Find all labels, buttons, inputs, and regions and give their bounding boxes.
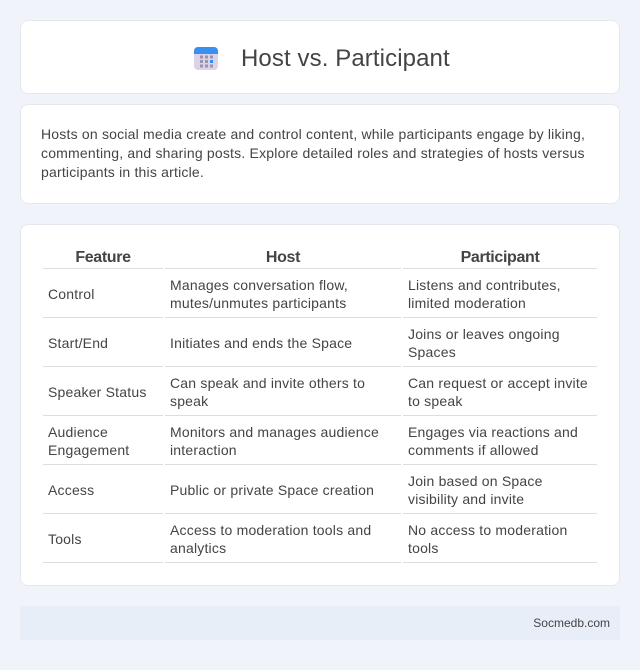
cell: Audience Engagement host: Monitors and manages audience — [170, 424, 379, 440]
cell: Access participant: Join based on Space — [408, 473, 543, 489]
cell: Tools participant: No access to moderation — [408, 522, 567, 538]
cell: Control participant — [408, 277, 561, 311]
row: Audience Engagement — [48, 424, 130, 458]
cell: Start/End participant — [408, 326, 560, 360]
title: Host vs. Participant — [241, 45, 450, 72]
intro text — [41, 126, 585, 180]
cell: Access host: Public or private Space creation — [170, 482, 374, 498]
cell: Start/End host: Initiates and ends the Space — [170, 335, 352, 351]
cell: Access participant — [408, 473, 543, 507]
cell: Tools participant — [408, 522, 567, 556]
intro text: Hosts on social media create and control content, while participants engage by liking, — [41, 126, 585, 142]
cell: Speaker Status participant — [408, 375, 588, 409]
intro text: commenting, and sharing posts. Explore detailed roles and strategies of hosts versus — [41, 145, 585, 161]
cell: Start/End participant: Joins or leaves ongoing — [408, 326, 560, 342]
cell: Speaker Status participant: Can request or accept invite — [408, 375, 588, 391]
panel: comparison table card — [20, 224, 620, 586]
cell: Tools host — [170, 522, 371, 556]
cell: Speaker Status participant: to speak — [408, 393, 463, 409]
cell: Audience Engagement participant: Engages via reactions and — [408, 424, 578, 440]
cell: Audience Engagement participant: comments if allowed — [408, 442, 539, 458]
cell: Tools host: analytics — [170, 540, 226, 556]
cell: Audience Engagement participant — [408, 424, 578, 458]
panel: intro card — [20, 104, 620, 204]
header: Participant: Participant — [461, 249, 539, 266]
cell: Control host — [170, 277, 348, 311]
cell: Tools host: Access to moderation tools and — [170, 522, 371, 538]
icon: calendar — [194, 47, 218, 70]
row: Audience Engagement: Engagement — [48, 442, 129, 458]
cell: Audience Engagement host: interaction — [170, 442, 237, 458]
cell: Access participant: visibility and invite — [408, 491, 524, 507]
intro text: participants in this article. — [41, 164, 204, 180]
cell: Control host: Manages conversation flow, — [170, 277, 348, 293]
footer text: Socmedb.com — [533, 616, 610, 630]
row: Tools: Tools — [48, 531, 82, 547]
row: Access: Access — [48, 482, 94, 498]
header: Host: Host — [266, 249, 300, 266]
row: Control: Control — [48, 286, 95, 302]
cell: Start/End participant: Spaces — [408, 344, 456, 360]
cell: Speaker Status host: speak — [170, 393, 208, 409]
cell: Control participant: limited moderation — [408, 295, 526, 311]
row: Audience Engagement: Audience — [48, 424, 108, 440]
cell: Speaker Status host: Can speak and invite others to — [170, 375, 365, 391]
header: Feature: Feature — [75, 249, 131, 266]
cell: Control participant: Listens and contributes, — [408, 277, 561, 293]
row: Start/End: Start/End — [48, 335, 108, 351]
panel: title card — [20, 20, 620, 94]
cell: Speaker Status host — [170, 375, 365, 409]
cell: Control host: mutes/unmutes participants — [170, 295, 346, 311]
cell: Audience Engagement host — [170, 424, 379, 458]
row: Speaker Status: Speaker Status — [48, 384, 147, 400]
footer bar — [20, 606, 620, 640]
cell: Tools participant: tools — [408, 540, 439, 556]
